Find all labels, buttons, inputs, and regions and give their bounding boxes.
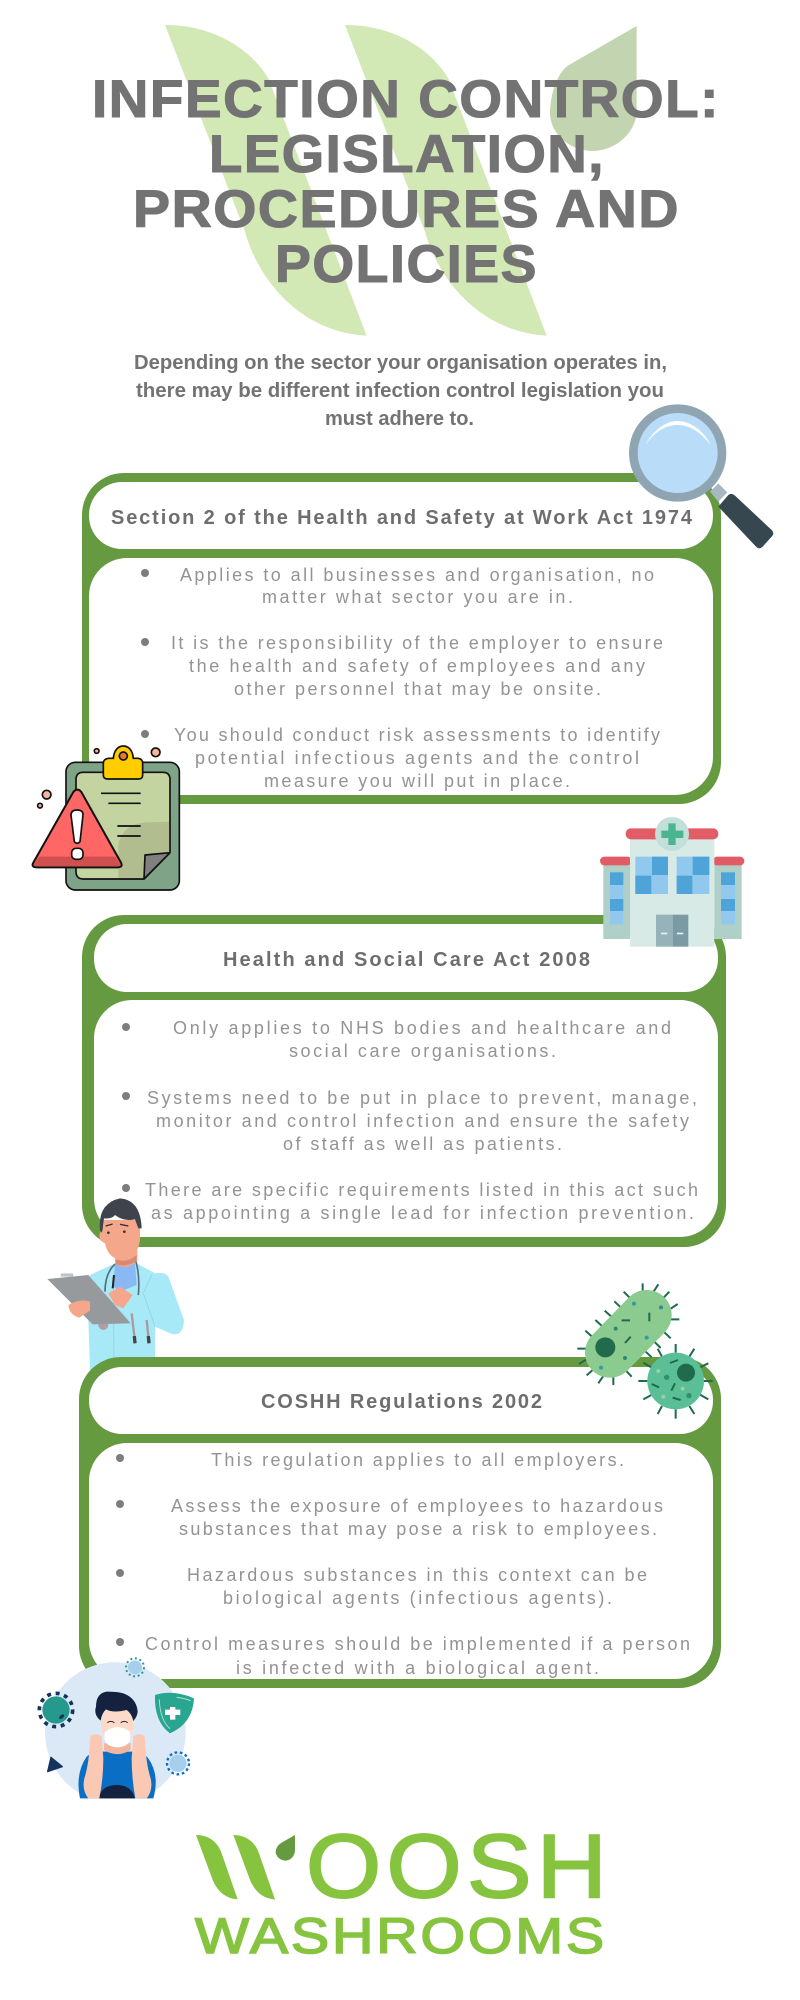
panel body list: measure you will put in place.	[264, 771, 570, 791]
intro text	[134, 352, 667, 430]
panel: COSHH Regulations 2002	[79, 1357, 721, 1688]
large rod bacterium	[577, 1283, 679, 1385]
panel body list: Systems need to be put in place to prevent, manage,	[147, 1088, 697, 1108]
panel body list: other personnel that may be onsite.	[234, 679, 601, 699]
logo: Woosh Washrooms	[195, 1817, 612, 1964]
panel body list: There are specific requirements listed in this act such	[145, 1180, 698, 1200]
panel header: Health and Social Care Act 2008	[223, 949, 590, 971]
logo mark	[196, 1835, 295, 1899]
panel body list: of staff as well as patients.	[283, 1134, 562, 1154]
panel body list: biological agents (infectious agents).	[223, 1588, 612, 1608]
panel body list	[89, 558, 713, 795]
panel body list: social care organisations.	[289, 1041, 556, 1061]
panel header	[89, 1367, 713, 1434]
panel body list: It is the responsibility of the employer to ensure	[171, 633, 663, 653]
panel body list: Control measures should be implemented if a person	[145, 1634, 690, 1654]
icon: hospital building	[600, 817, 744, 947]
panel body list: as appointing a single lead for infection prevention.	[151, 1203, 694, 1223]
panel body list: Assess the exposure of employees to hazardous	[171, 1496, 663, 1516]
logo: Woosh Washrooms: WASHROOMS	[195, 1908, 607, 1964]
icon: person wearing mask	[39, 1658, 194, 1798]
title	[92, 70, 720, 294]
title: POLICIES	[275, 235, 538, 294]
panel body list: substances that may pose a risk to employees.	[179, 1519, 657, 1539]
panel body list: is infected with a biological agent.	[236, 1658, 599, 1678]
intro text: Depending on the sector your organisation operates in,	[134, 352, 667, 374]
panel body list: Only applies to NHS bodies and healthcare and	[173, 1018, 671, 1038]
panel body list	[94, 1000, 718, 1237]
virus: lower right	[167, 1752, 189, 1774]
intro text: there may be different infection control legislation you	[136, 380, 664, 402]
title: LEGISLATION,	[209, 125, 605, 184]
panel header	[89, 482, 713, 549]
icon: doctor with clipboard	[47, 1198, 184, 1370]
panel header: COSHH Regulations 2002	[261, 1391, 542, 1413]
logo: Woosh Washrooms: OOSH	[306, 1817, 612, 1917]
panel body list: You should conduct risk assessments to identify	[174, 725, 660, 745]
virus: top	[126, 1658, 144, 1676]
panel body list: Applies to all businesses and organisation, no	[180, 565, 654, 585]
icon: bacteria	[577, 1283, 713, 1419]
panel header	[94, 924, 718, 992]
title: PROCEDURES AND	[133, 180, 680, 239]
panel body list: matter what sector you are in.	[262, 587, 573, 607]
small round bacterium	[638, 1344, 713, 1419]
panel body list: the health and safety of employees and any	[189, 656, 645, 676]
panel: Health and Social Care Act 2008	[82, 915, 726, 1247]
icon: magnifying glass	[629, 404, 773, 548]
panel body list: potential infectious agents and the control	[195, 748, 639, 768]
intro text: must adhere to.	[325, 408, 474, 430]
panel body list: Hazardous substances in this context can be	[187, 1565, 647, 1585]
icon: clipboard with warning triangle	[33, 746, 179, 890]
panel body list: This regulation applies to all employers.	[211, 1450, 624, 1470]
panel header: Section 2 of the Health and Safety at Work Act 1974	[111, 507, 693, 529]
panel body list: monitor and control infection and ensure the safety	[156, 1111, 689, 1131]
panel: Section 2 of the Health and Safety at Work Act 1974	[82, 473, 721, 804]
panel body list	[89, 1443, 713, 1679]
background logo watermark	[165, 25, 637, 336]
virus: teal	[39, 1693, 73, 1727]
shield	[155, 1693, 194, 1733]
title: INFECTION CONTROL:	[92, 70, 720, 129]
